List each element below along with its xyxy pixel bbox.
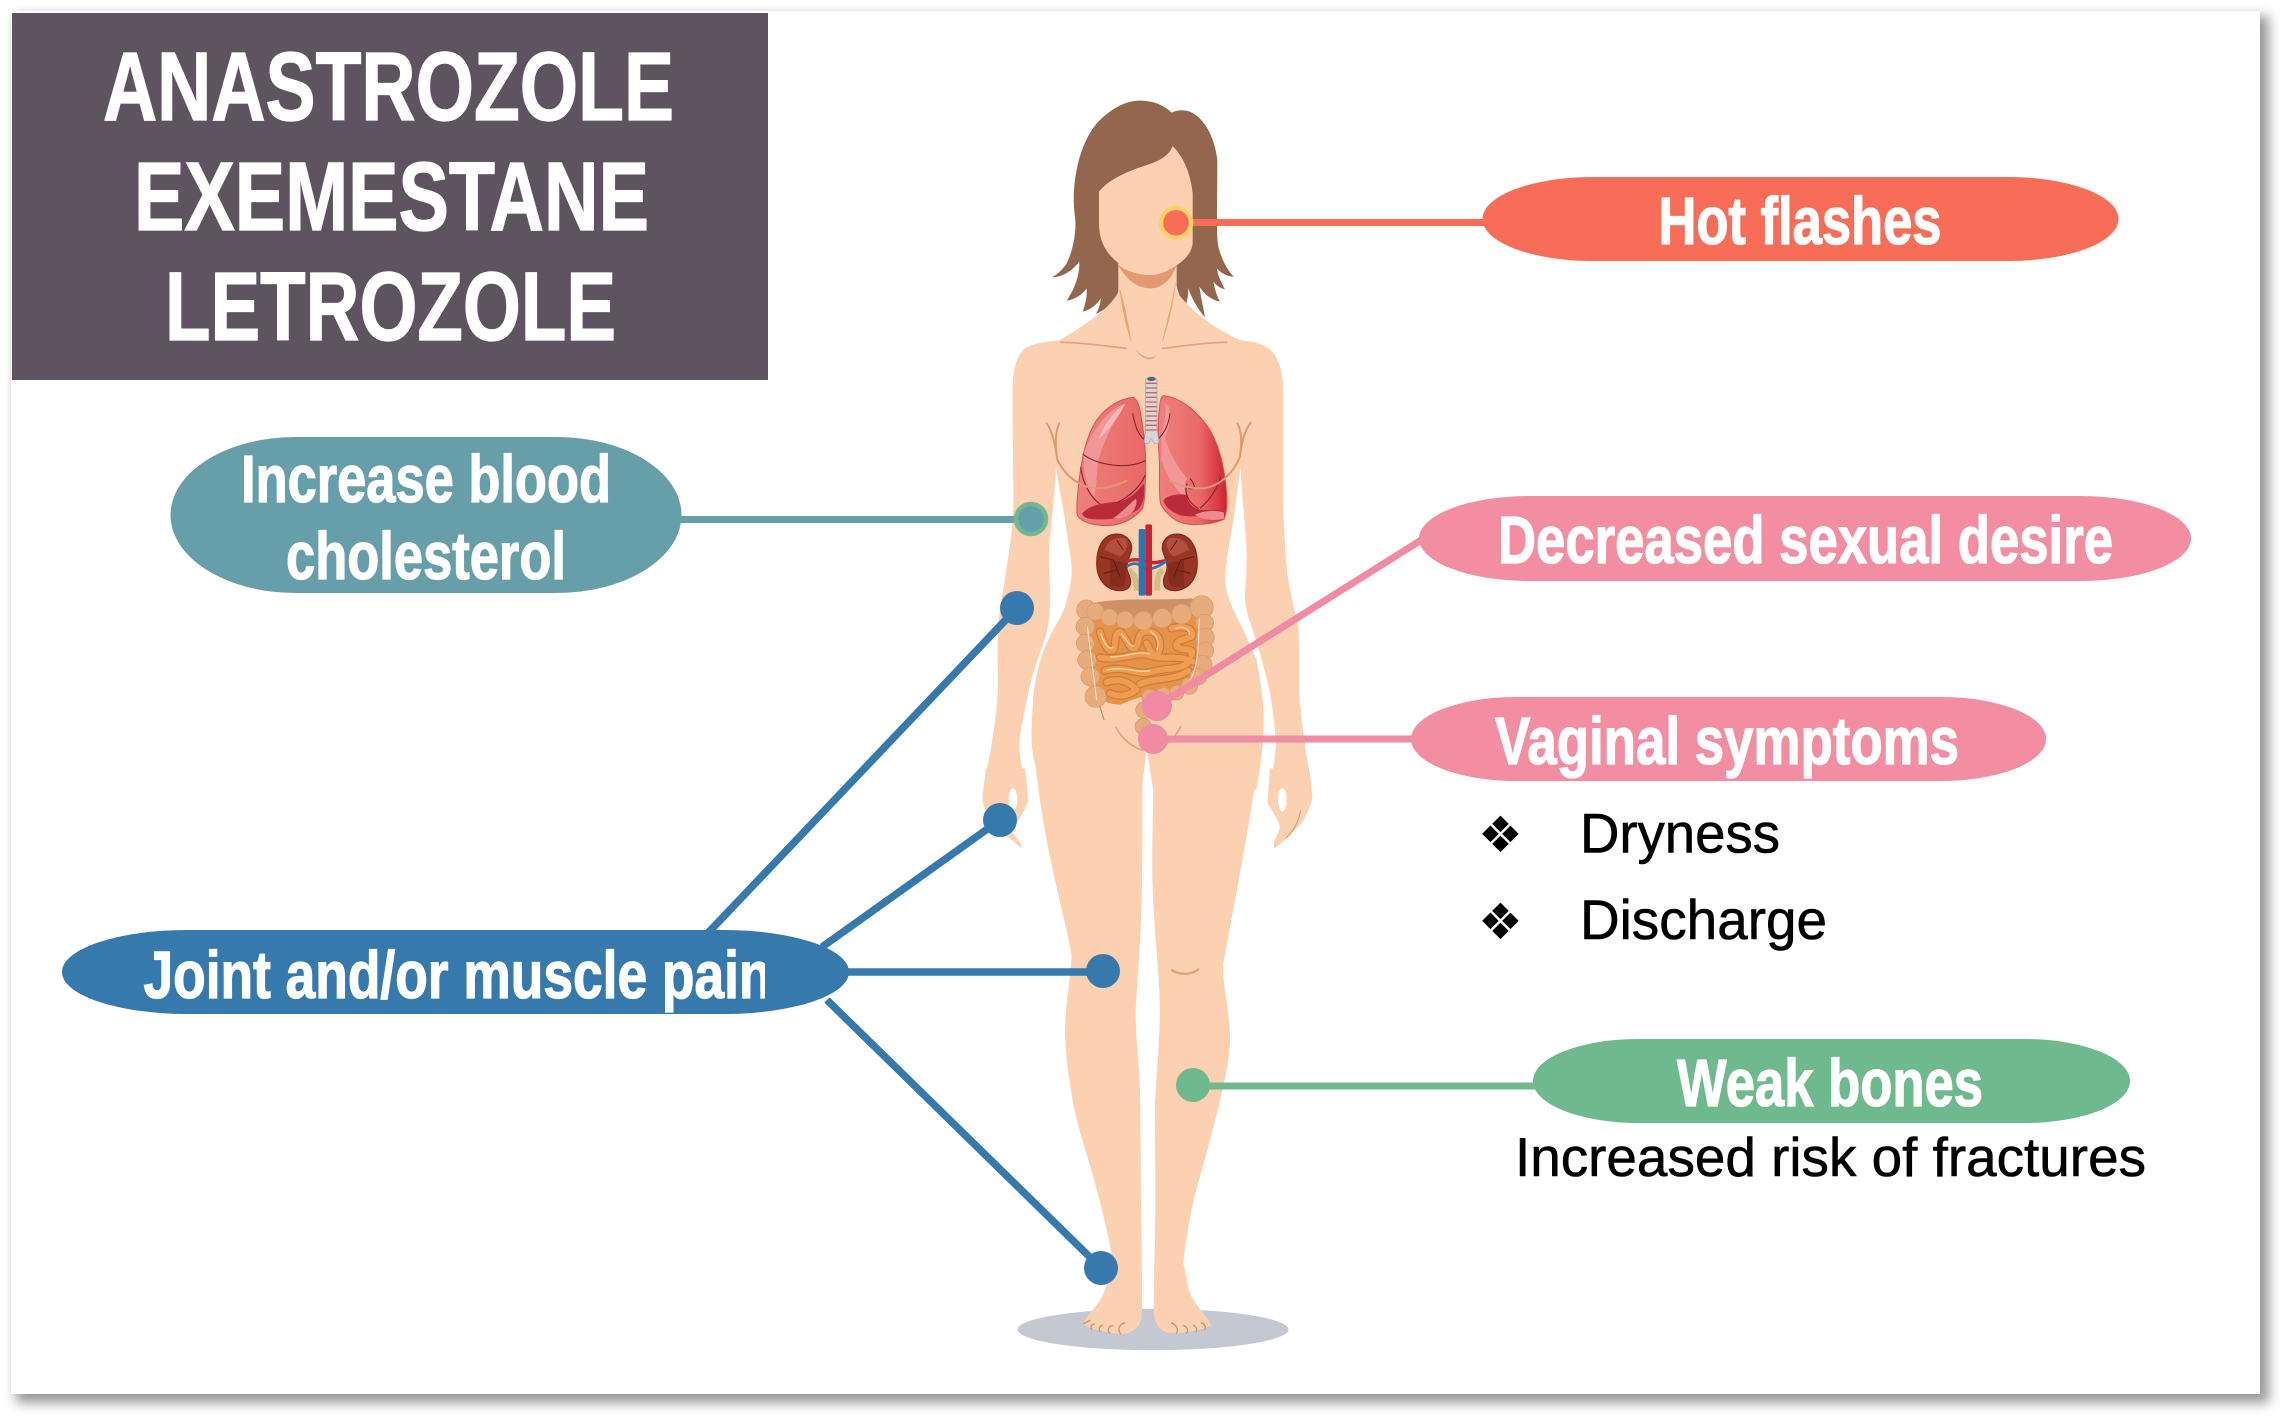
female body figure: [982, 101, 1313, 1334]
left hand opening: [1009, 788, 1017, 811]
connector: vaginal symptoms: [1138, 724, 1415, 754]
right hand crease: [1286, 811, 1301, 838]
crotch gap: [1142, 748, 1153, 792]
vena cava: [1139, 529, 1145, 596]
note: fractures: Increased risk of fractures: [1515, 1126, 2146, 1188]
vaginal symptom list: ❖: [1478, 893, 1523, 951]
pill: increase blood cholesterol: Increase blood: [241, 442, 611, 517]
left lung base shadow: [1082, 483, 1144, 519]
pill: weak bones: Weak bones: [1677, 1046, 1983, 1121]
floor shadow: [1018, 1309, 1288, 1350]
pill: joint and muscle pain: Joint and/or muscle pain: [144, 938, 772, 1013]
left arm gap: [1019, 467, 1072, 792]
pill: decreased sexual desire: Decreased sexual desire: [1498, 503, 2113, 578]
torso and arms: [983, 260, 1312, 790]
title box: [12, 13, 768, 380]
vaginal symptom list: Dryness: [1580, 802, 1780, 864]
pill: increase blood cholesterol: cholesterol: [286, 519, 566, 594]
pill: increase blood cholesterol: [170, 437, 682, 594]
ureters: [1128, 570, 1163, 591]
aorta: [1145, 524, 1152, 596]
connector: cholesterol: [680, 504, 1046, 534]
left lung highlight: [1084, 403, 1125, 497]
title box: EXEMESTANE: [134, 142, 649, 251]
lung fissures: [1081, 413, 1221, 508]
face and neck shadow: [1061, 146, 1227, 359]
connector: sexual desire: [1142, 537, 1426, 721]
right lung: [1158, 396, 1227, 525]
right hand: [1267, 769, 1313, 848]
vaginal symptom list: ❖: [1478, 806, 1523, 864]
connector: hot flashes: [1161, 208, 1486, 238]
vaginal symptom list: [1478, 802, 1827, 951]
title box: ANASTROZOLE: [103, 32, 674, 141]
pill: vaginal symptoms: Vaginal symptoms: [1495, 704, 1959, 779]
right leg and foot: [1152, 770, 1257, 1333]
right lung base shadow: [1163, 494, 1224, 517]
breast contour lines: [1047, 423, 1251, 489]
left lung: [1077, 397, 1146, 526]
pill: weak bones: [1533, 1039, 2130, 1123]
trachea: [1144, 377, 1159, 444]
left hand: [982, 769, 1028, 848]
lungs and trachea: [1077, 377, 1227, 526]
left kidney: [1097, 534, 1132, 591]
pill: hot flashes: [1482, 177, 2118, 261]
right hand opening: [1278, 788, 1287, 811]
left leg and foot: [1036, 770, 1142, 1334]
intestines: [1076, 596, 1214, 735]
connector: joint pain: [707, 591, 1120, 1285]
vaginal symptom list: Discharge: [1580, 888, 1827, 951]
connector: weak bones: [1176, 1068, 1538, 1102]
hair: [1052, 101, 1234, 317]
pill: hot flashes: Hot flashes: [1658, 184, 1942, 259]
pelvis line, knee and toes: [1084, 727, 1205, 1334]
right arm gap: [1225, 467, 1276, 792]
kidneys and vessels: [1097, 524, 1197, 596]
right kidney: [1162, 534, 1197, 591]
renal vessels: [1127, 560, 1165, 563]
title box: LETROZOLE: [165, 252, 616, 361]
right lung highlight: [1161, 403, 1187, 498]
